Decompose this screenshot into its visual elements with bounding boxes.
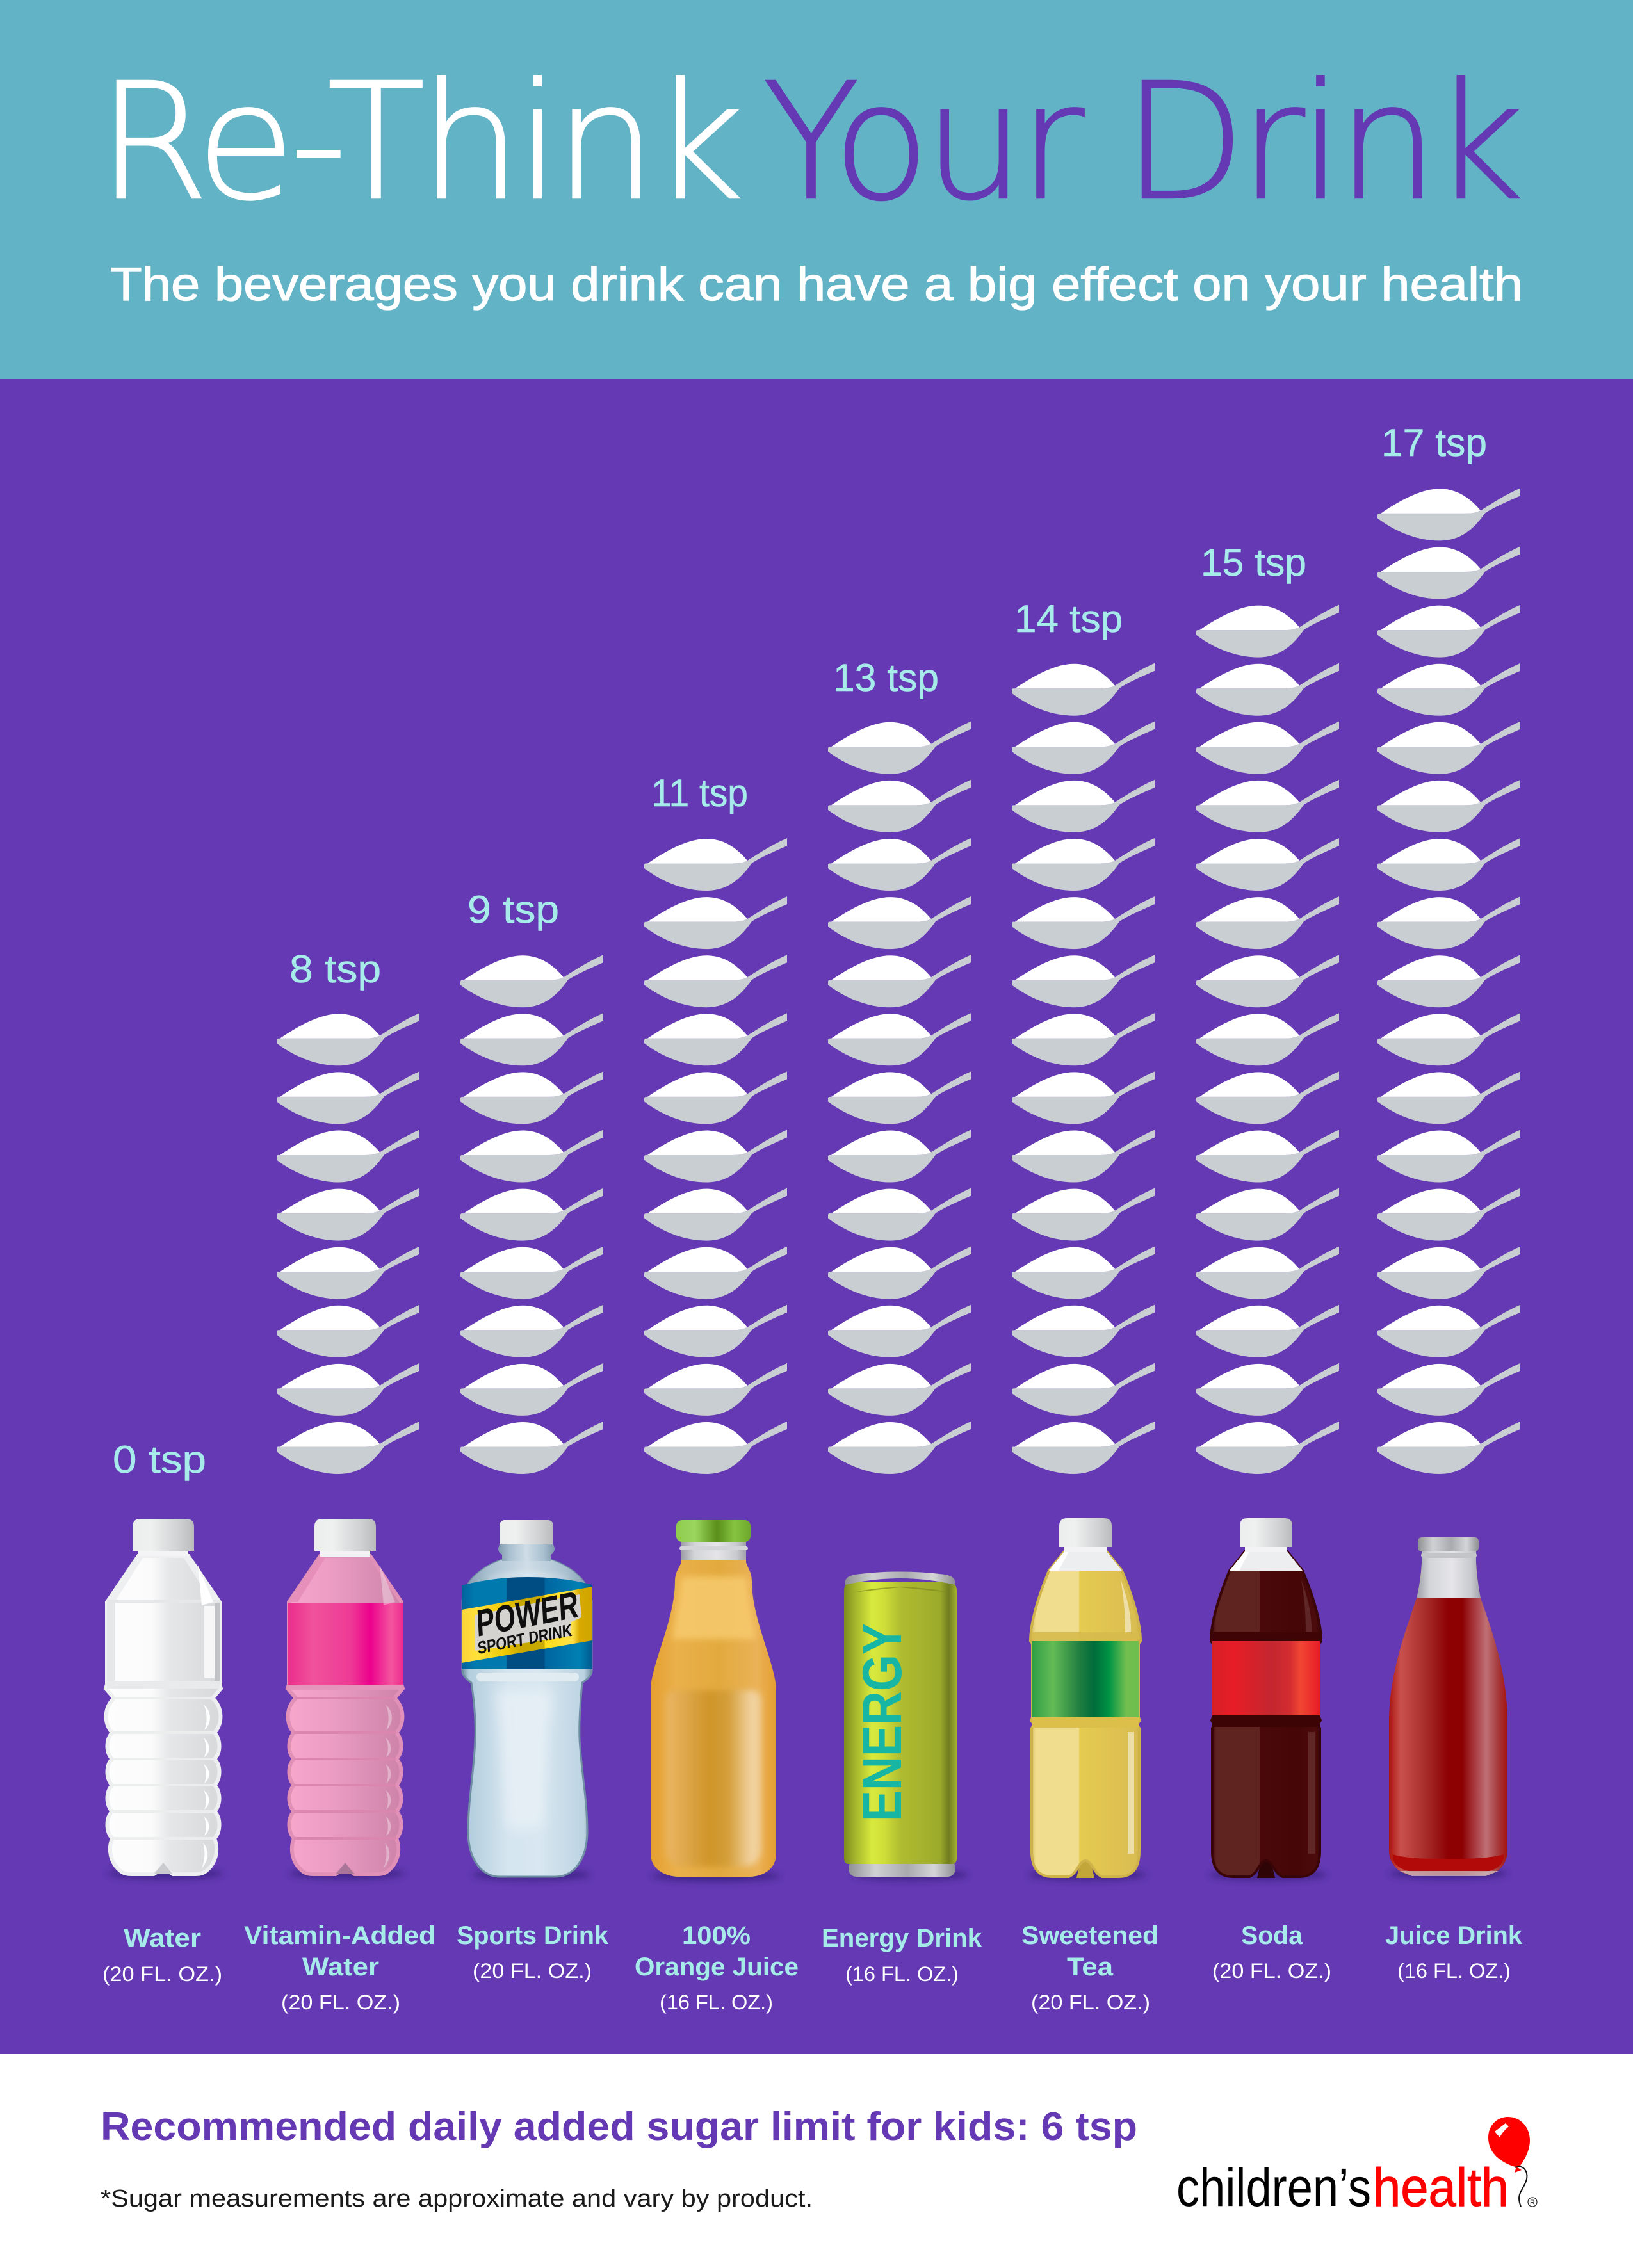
bottle: juice drink — [1389, 1537, 1507, 1876]
label: soda — [1212, 1922, 1331, 1982]
label: water: (20 FL. OZ.) — [102, 1963, 222, 1986]
label: vitamin-added water — [244, 1922, 435, 2014]
spoon column: 13 tsp — [828, 656, 971, 1474]
label: juice drink — [1385, 1922, 1523, 1982]
spoon column: 11 tsp — [644, 772, 787, 1474]
header band — [0, 0, 1633, 379]
title — [97, 49, 1520, 236]
bottle: orange juice — [651, 1520, 776, 1877]
label: juice drink: (16 FL. OZ.) — [1397, 1959, 1511, 1982]
icon: balloon — [1488, 2117, 1530, 2207]
registered mark — [1528, 2198, 1537, 2207]
label: vitamin-added water: (20 FL. OZ.) — [281, 1991, 400, 2014]
label: energy drink: Energy Drink — [822, 1924, 982, 1952]
label: juice drink: Juice Drink — [1385, 1922, 1523, 1950]
spoon column: 14 tsp — [1012, 597, 1155, 1474]
label: sports drink: Sports Drink — [457, 1922, 609, 1950]
label: vitamin-added water: Water — [302, 1953, 379, 1981]
bottle shadows — [108, 1868, 1507, 1882]
label: energy drink — [822, 1924, 982, 1986]
label: soda: Soda — [1241, 1922, 1303, 1950]
title: Your Drink — [763, 49, 1520, 236]
label: sports drink: (20 FL. OZ.) — [473, 1959, 592, 1982]
label: orange juice: (16 FL. OZ.) — [660, 1991, 773, 2014]
label: sweetened tea: Tea — [1067, 1953, 1114, 1981]
spoon column: 9 tsp — [460, 888, 603, 1474]
purple main panel — [0, 379, 1633, 2054]
spoon column: 15 tsp: 15 tsp — [1201, 541, 1306, 584]
can: energy drink: ENERGY — [852, 1623, 913, 1822]
label: orange juice: Orange Juice — [635, 1953, 799, 1981]
label: orange juice — [635, 1922, 799, 2014]
spoon column: 15 tsp — [1196, 541, 1339, 1474]
sports drink label: SPORT DRINK — [477, 1619, 573, 1658]
title: Re-Think — [97, 49, 740, 236]
bottle: vitamin-added water — [288, 1519, 403, 1874]
registered mark: R — [1530, 2199, 1535, 2207]
bottle: soda — [1211, 1518, 1321, 1878]
bottle: water — [106, 1519, 221, 1874]
label: orange juice: 100% — [682, 1922, 751, 1950]
label: sports drink — [457, 1922, 609, 1982]
spoon column: 17 tsp: 17 tsp — [1381, 421, 1487, 464]
label: sweetened tea: (20 FL. OZ.) — [1031, 1991, 1150, 2014]
label: water: Water — [124, 1924, 201, 1952]
subtitle: The beverages you drink can have a big effect on your health — [110, 259, 1523, 311]
spoon column: 9 tsp: 9 tsp — [467, 888, 559, 931]
spoon column: 14 tsp: 14 tsp — [1014, 597, 1123, 640]
logo: children's health: children’s — [1176, 2157, 1371, 2217]
tsp label: water: 0 tsp — [113, 1438, 206, 1481]
label: sweetened tea — [1021, 1922, 1158, 2014]
can: energy drink — [844, 1571, 957, 1877]
label: water — [102, 1924, 222, 1986]
spoon column: 17 tsp — [1377, 421, 1520, 1474]
bottle: sweetened tea — [1030, 1518, 1141, 1878]
sports drink label — [462, 1577, 592, 1669]
label: energy drink: (16 FL. OZ.) — [845, 1963, 959, 1986]
label: vitamin-added water: Vitamin-Added — [244, 1922, 435, 1950]
label: sweetened tea: Sweetened — [1021, 1922, 1158, 1950]
logo: children's health: health — [1373, 2157, 1509, 2217]
spoon column: 13 tsp: 13 tsp — [833, 656, 939, 699]
spoon column: 8 tsp — [277, 948, 419, 1474]
logo: children's health — [1176, 2117, 1537, 2217]
label: soda: (20 FL. OZ.) — [1212, 1959, 1331, 1982]
spoon column: 8 tsp: 8 tsp — [289, 948, 381, 991]
white footer band — [0, 2054, 1633, 2268]
daily limit statement: Recommended daily added sugar limit for kids: 6 tsp — [101, 2105, 1137, 2149]
footnote: *Sugar measurements are approximate and vary by product. — [101, 2185, 813, 2212]
bottle: sports drink — [462, 1520, 592, 1877]
sports drink label: POWER — [475, 1584, 580, 1645]
spoon column: 11 tsp: 11 tsp — [651, 772, 748, 814]
